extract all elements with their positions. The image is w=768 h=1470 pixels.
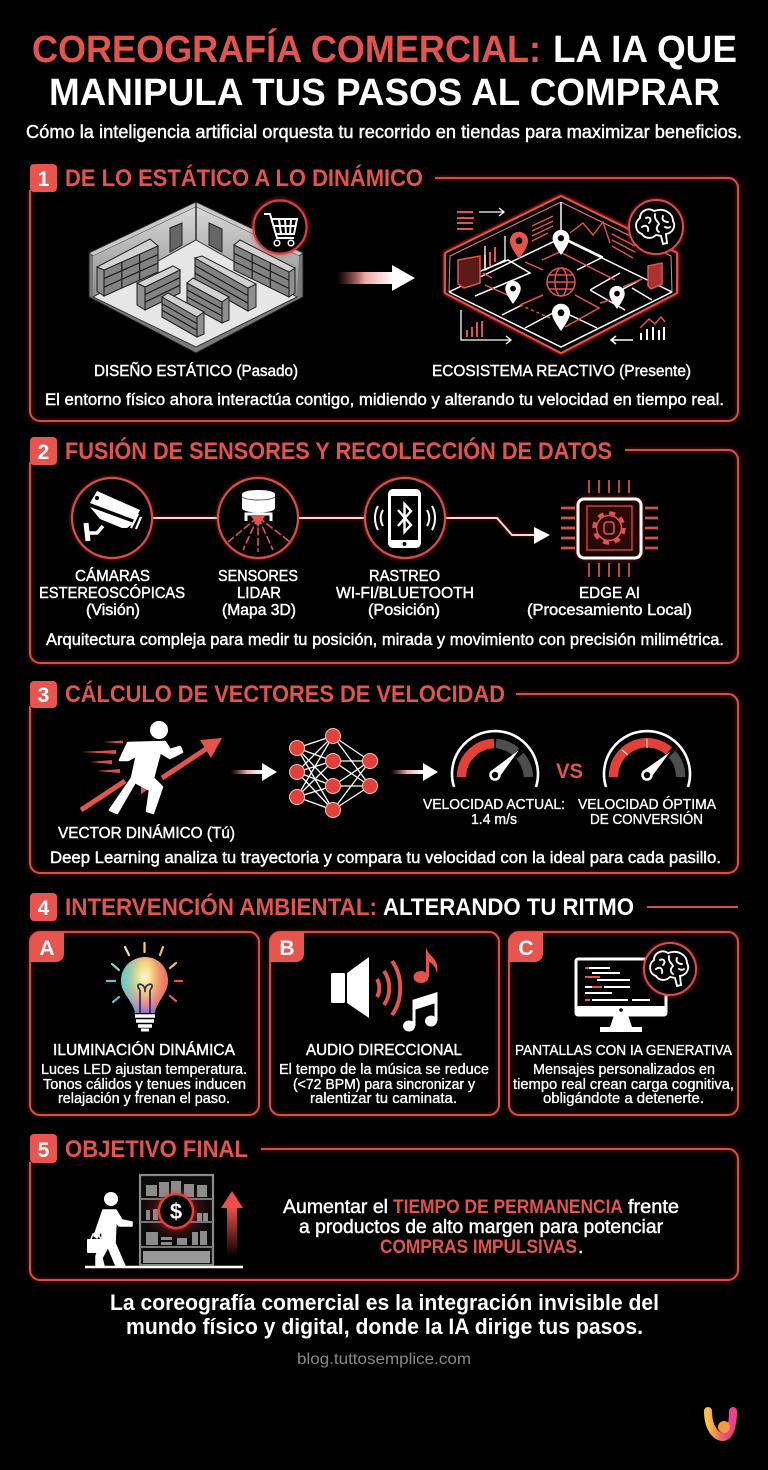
icon: neural network bbox=[290, 728, 378, 818]
icon: brain badge bbox=[644, 943, 696, 995]
gauge: optimal speed bbox=[604, 731, 690, 787]
icon: shopper at shelf bbox=[85, 1175, 243, 1267]
heading 2: FUSIÓN DE SENSORES Y RECOLECCIÓN DE DATOS bbox=[65, 437, 612, 465]
label: tracking: WI-FI/BLUETOOTH bbox=[336, 585, 474, 602]
icon: edge AI chip bbox=[561, 480, 658, 577]
label: lidar: (Mapa 3D) bbox=[222, 602, 296, 619]
icon: camera bbox=[72, 478, 152, 558]
goal text: COMPRAS IMPULSIVAS bbox=[380, 1237, 577, 1258]
label: cameras: CÁMARAS bbox=[75, 566, 150, 585]
label: edge AI: EDGE AI bbox=[579, 585, 640, 602]
label: reactive ecosystem: ECOSISTEMA REACTIVO (Presente) bbox=[432, 363, 691, 380]
label: lidar: LIDAR bbox=[237, 585, 281, 602]
goal text: . bbox=[578, 1237, 583, 1258]
icon: monitor bbox=[575, 959, 667, 1032]
heading 1: DE LO ESTÁTICO A LO DINÁMICO bbox=[65, 164, 423, 192]
label: cameras: ESTEREOSCÓPICAS bbox=[39, 583, 185, 602]
title: LA IA QUE bbox=[553, 29, 737, 71]
panel 2: fusión de sensores: 2 bbox=[38, 441, 49, 464]
card B text: (<72 BPM) para sincronizar y bbox=[293, 1076, 475, 1093]
card A: iluminación dinámica bbox=[30, 932, 259, 1115]
icon: brain badge bbox=[629, 200, 683, 254]
card C text: obligándote a detenerte. bbox=[543, 1090, 704, 1107]
label: tracking: RASTREO bbox=[369, 568, 440, 585]
goal text: frente bbox=[628, 1197, 679, 1218]
label: tracking bbox=[336, 568, 474, 619]
label: dynamic vector: VECTOR DINÁMICO (Tú) bbox=[58, 823, 235, 842]
source: blog.tuttosemplice.com bbox=[297, 1351, 471, 1368]
arrow: static to reactive bbox=[337, 265, 415, 291]
gauge: current speed bbox=[452, 731, 538, 787]
conclusion bbox=[110, 1290, 659, 1339]
panel 1: de lo estático a lo dinámico bbox=[30, 164, 738, 421]
card C: pantallas con IA generativa bbox=[509, 932, 738, 1115]
icon: speaker and notes bbox=[331, 947, 437, 1032]
description 2: Arquitectura compleja para medir tu posición, mirada y movimiento con precisión milimétrica. bbox=[46, 630, 724, 649]
card B: audio direccional: B bbox=[279, 937, 295, 960]
section 4 heading: INTERVENCIÓN AMBIENTAL: bbox=[65, 893, 377, 921]
label: lidar: SENSORES bbox=[218, 568, 298, 585]
description 1: El entorno físico ahora interactúa contigo, midiendo y alterando tu velocidad en tiempo real. bbox=[45, 390, 724, 409]
card B text: El tempo de la música se reduce bbox=[279, 1061, 489, 1078]
label: current speed bbox=[423, 796, 565, 828]
arrowhead bbox=[534, 527, 550, 544]
card A text bbox=[41, 1040, 247, 1107]
shelf units bbox=[97, 239, 295, 337]
card A text: ILUMINACIÓN DINÁMICA bbox=[53, 1040, 235, 1059]
card B text bbox=[279, 1042, 489, 1107]
label: current speed: VELOCIDAD ACTUAL: bbox=[423, 796, 565, 813]
conclusion: mundo físico y digital, donde la IA dirige tus pasos. bbox=[126, 1314, 643, 1339]
label: tracking: (Posición) bbox=[368, 602, 440, 619]
title bbox=[32, 27, 737, 114]
panel 5: objetivo final bbox=[30, 1134, 738, 1280]
panel 5: objetivo final: 5 bbox=[38, 1139, 50, 1162]
arrow bbox=[230, 763, 277, 781]
icon: bulb bbox=[107, 943, 182, 1030]
subtitle: Cómo la inteligencia artificial orquesta tu recorrido en tiendas para maximizar beneficios. bbox=[26, 122, 742, 142]
label: edge AI bbox=[527, 585, 692, 619]
card C text: PANTALLAS CON IA GENERATIVA bbox=[515, 1042, 732, 1059]
label: static design: DISEÑO ESTÁTICO (Pasado) bbox=[94, 360, 298, 380]
icon: phone bluetooth bbox=[365, 478, 445, 558]
label: edge AI: (Procesamiento Local) bbox=[527, 602, 692, 619]
label: optimal speed bbox=[578, 796, 716, 828]
icon: cart badge bbox=[247, 194, 313, 260]
logo bbox=[708, 1411, 733, 1437]
card C text bbox=[513, 1042, 734, 1107]
arrow bbox=[390, 763, 438, 781]
label: optimal speed: DE CONVERSIÓN bbox=[590, 811, 703, 828]
card C: pantallas con IA generativa: C bbox=[518, 937, 534, 960]
label: lidar bbox=[218, 568, 298, 619]
goal text: TIEMPO DE PERMANENCIA bbox=[393, 1197, 623, 1218]
title: MANIPULA TUS PASOS AL COMPRAR bbox=[49, 72, 720, 114]
title: COREOGRAFÍA COMERCIAL: bbox=[32, 27, 541, 71]
label: current speed: 1.4 m/s bbox=[471, 811, 517, 828]
panel 1: de lo estático a lo dinámico: 1 bbox=[38, 168, 50, 191]
conclusion: La coreografía comercial es la integración invisible del bbox=[110, 1290, 659, 1315]
label: cameras bbox=[39, 566, 185, 619]
panel 2: fusión de sensores bbox=[30, 437, 738, 663]
card C text: tiempo real crean carga cognitiva, bbox=[513, 1076, 734, 1093]
icon: static store bbox=[89, 202, 303, 353]
goal text: a productos de alto margen para potenciar bbox=[299, 1217, 664, 1238]
card A: iluminación dinámica: A bbox=[39, 937, 55, 960]
label: cameras: (Visión) bbox=[86, 602, 140, 619]
connector line bbox=[152, 518, 536, 535]
section 4 heading bbox=[30, 893, 738, 921]
section 4 heading: ALTERANDO TU RITMO bbox=[383, 894, 634, 921]
label: optimal speed: VELOCIDAD ÓPTIMA bbox=[578, 796, 716, 813]
heading 5: OBJETIVO FINAL bbox=[65, 1136, 248, 1163]
description 3: Deep Learning analiza tu trayectoria y compara tu velocidad con la ideal para cada pasillo. bbox=[50, 848, 721, 867]
card B text: AUDIO DIRECCIONAL bbox=[306, 1042, 462, 1059]
card B: audio direccional bbox=[270, 932, 499, 1115]
card A text: Luces LED ajustan temperatura. bbox=[41, 1061, 247, 1078]
icon: lidar bbox=[218, 478, 298, 558]
panel 3: vectores de velocidad bbox=[30, 680, 738, 873]
card B text: ralentizar tu caminata. bbox=[310, 1090, 457, 1107]
heading 3: CÁLCULO DE VECTORES DE VELOCIDAD bbox=[65, 680, 505, 708]
icon: runner with vector arrow bbox=[81, 721, 222, 813]
panel 3: vectores de velocidad: 3 bbox=[38, 684, 49, 707]
goal text bbox=[283, 1197, 679, 1258]
text: VS: VS bbox=[556, 760, 583, 783]
card C text: Mensajes personalizados en bbox=[533, 1061, 715, 1078]
icon: shopper at shelf: $ bbox=[170, 1199, 182, 1224]
goal text: Aumentar el bbox=[283, 1197, 388, 1218]
section 4 heading: 4 bbox=[38, 897, 50, 920]
icon: reactive ecosystem bbox=[445, 196, 677, 353]
card A text: Tonos cálidos y tenues inducen bbox=[43, 1076, 246, 1093]
card A text: relajación y frenan el paso. bbox=[58, 1090, 230, 1107]
